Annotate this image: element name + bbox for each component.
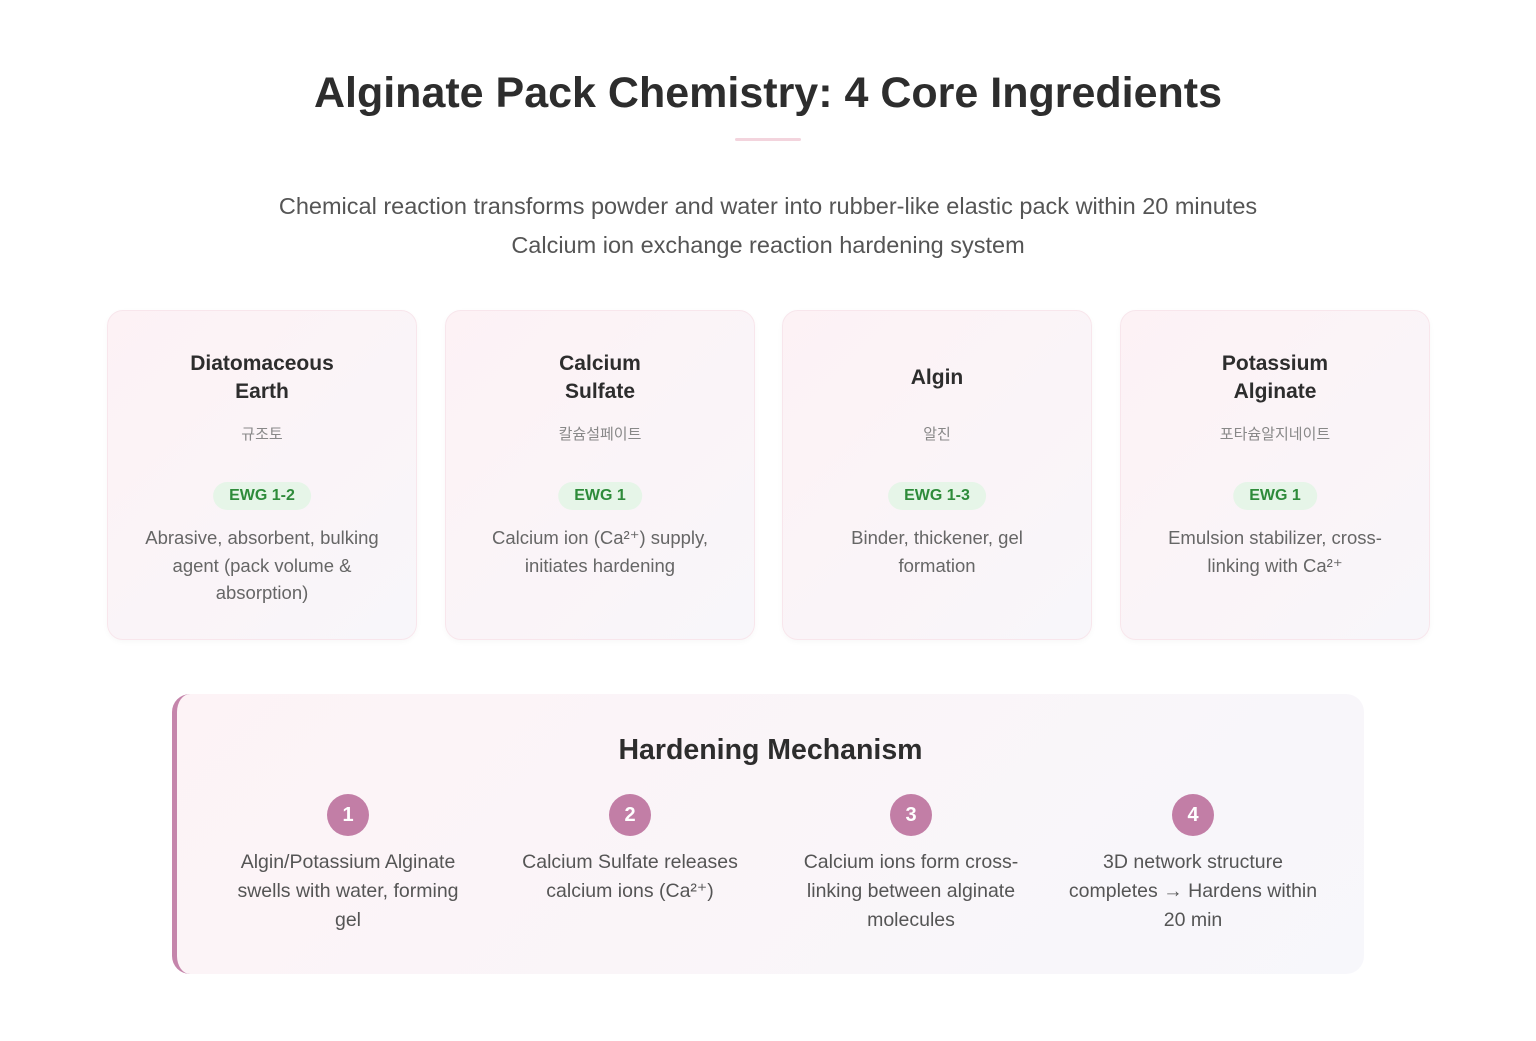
subtitle line 1: Chemical reaction transforms powder and water into rubber-like elastic pack within 20 minutes: [279, 193, 1257, 219]
card: potassium alginate: EWG 1: [1249, 487, 1301, 504]
card: potassium alginate: 포타슘알지네이트: [1220, 426, 1330, 443]
step 4: [1069, 794, 1317, 931]
step 3: [804, 794, 1018, 931]
card: algin: Binder, thickener, gel formation: [851, 527, 1023, 576]
mechanism heading: Hardening Mechanism: [618, 734, 923, 766]
card: calcium sulfate: Calcium: [559, 352, 641, 375]
subtitle line 2: Calcium ion exchange reaction hardening system: [511, 232, 1025, 258]
step 4: 3D network structure completes → Hardens within 20 min: [1069, 851, 1317, 931]
step 3: 3: [905, 804, 917, 826]
step 2: Calcium Sulfate releases calcium ions (Ca²⁺): [522, 851, 738, 902]
card: calcium sulfate: Calcium ion (Ca²⁺) supply, initiates hardening: [492, 527, 708, 576]
title: Alginate Pack Chemistry: 4 Core Ingredients: [314, 69, 1222, 117]
step 4: 4: [1187, 804, 1199, 826]
card: potassium alginate: Potassium: [1222, 352, 1328, 375]
step 1: [237, 794, 459, 931]
card: diatomaceous earth: EWG 1-2: [229, 487, 295, 504]
card: algin: Algin: [911, 366, 963, 389]
card: potassium alginate: Alginate: [1234, 380, 1316, 403]
card: diatomaceous earth: 규조토: [241, 426, 283, 443]
card: diatomaceous earth: Diatomaceous: [190, 352, 334, 375]
card: diatomaceous earth: [107, 310, 417, 640]
card: calcium sulfate: 칼슘설페이트: [559, 426, 641, 443]
card: diatomaceous earth: Abrasive, absorbent, bulking agent (pack volume & absorption): [145, 527, 379, 603]
step 2: 2: [624, 804, 636, 826]
card: algin: EWG 1-3: [904, 487, 970, 504]
title underline: [735, 138, 801, 141]
card: calcium sulfate: [445, 310, 755, 640]
step 1: 1: [342, 804, 354, 826]
card: potassium alginate: [1120, 310, 1430, 640]
panel: hardening mechanism: [172, 694, 1364, 974]
card: diatomaceous earth: Earth: [235, 380, 289, 403]
card: algin: [782, 310, 1092, 640]
step 3: Calcium ions form cross-linking between alginate molecules: [804, 851, 1018, 931]
card: calcium sulfate: Sulfate: [565, 380, 635, 403]
step 1: Algin/Potassium Alginate swells with water, forming gel: [237, 851, 459, 931]
card: potassium alginate: Emulsion stabilizer, cross-linking with Ca²⁺: [1168, 527, 1382, 576]
step 2: [522, 794, 738, 902]
card: algin: 알진: [923, 426, 951, 443]
card: calcium sulfate: EWG 1: [574, 487, 626, 504]
